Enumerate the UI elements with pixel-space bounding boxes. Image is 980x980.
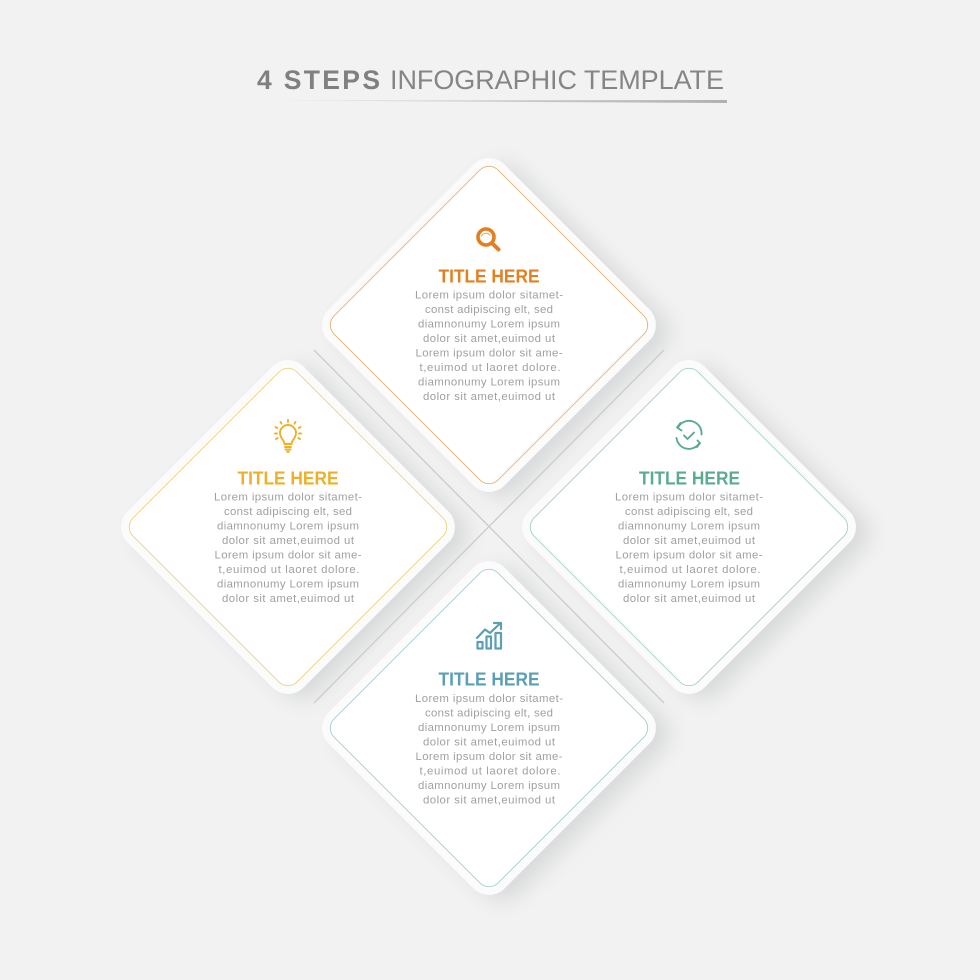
text block: Lorem ipsum dolor sitamet- — [415, 693, 563, 705]
text block: diamnonumy Lorem ipsum — [418, 319, 560, 331]
icon: magnifier — [478, 229, 498, 250]
text block: dolor sit amet,euimod ut — [423, 333, 556, 345]
panel: right step — [513, 351, 865, 703]
heading: TITLE HERE — [639, 468, 740, 488]
text block: dolor sit amet,euimod ut — [423, 391, 556, 403]
icon: refresh check — [676, 421, 702, 449]
text block: diamnonumy Lorem ipsum — [418, 376, 560, 388]
icon: light bulb — [275, 420, 301, 452]
title: 4 STEPS — [257, 65, 380, 95]
text block: t,euimod ut laoret dolore. — [420, 765, 560, 777]
text block: t,euimod ut laoret dolore. — [420, 362, 560, 374]
panel: bottom step — [313, 552, 665, 904]
text block — [415, 693, 563, 806]
heading: TITLE HERE — [238, 468, 338, 488]
text block: t,euimod ut laoret dolore. — [620, 564, 760, 576]
heading: TITLE HERE — [438, 266, 540, 286]
title underline — [257, 100, 727, 103]
text block: Lorem ipsum dolor sit ame- — [214, 550, 362, 562]
card shadows — [127, 156, 878, 909]
panel: left step — [112, 351, 464, 703]
text block: diamnonumy Lorem ipsum — [217, 578, 359, 590]
text block: Lorem ipsum dolor sitamet- — [214, 492, 362, 504]
text block: const adipiscing elt, sed — [224, 506, 352, 518]
title: INFOGRAPHIC TEMPLATE — [390, 65, 724, 95]
heading: TITLE HERE — [438, 668, 540, 690]
text block: Lorem ipsum dolor sitamet- — [415, 290, 563, 302]
text block: diamnonumy Lorem ipsum — [618, 578, 760, 590]
text block: const adipiscing elt, sed — [625, 506, 753, 518]
text block: dolor sit amet,euimod ut — [222, 535, 355, 547]
text block: Lorem ipsum dolor sit ame- — [416, 751, 563, 763]
text block: dolor sit amet,euimod ut — [623, 593, 756, 605]
text block: Lorem ipsum dolor sitamet- — [615, 492, 763, 504]
text block — [415, 290, 563, 403]
text block: const adipiscing elt, sed — [425, 304, 553, 316]
text block: diamnonumy Lorem ipsum — [418, 780, 560, 792]
text block: dolor sit amet,euimod ut — [423, 794, 556, 806]
text block: diamnonumy Lorem ipsum — [618, 521, 760, 533]
text block: dolor sit amet,euimod ut — [623, 535, 756, 547]
text block — [615, 492, 763, 605]
text block — [214, 492, 362, 605]
text block: Lorem ipsum dolor sit ame- — [616, 550, 763, 562]
text block: Lorem ipsum dolor sit ame- — [416, 348, 563, 360]
text block: diamnonumy Lorem ipsum — [418, 722, 560, 734]
cross divider lines — [314, 350, 664, 703]
icon: growth chart — [477, 623, 501, 648]
panel: top step — [313, 149, 665, 501]
text block: const adipiscing elt, sed — [425, 708, 553, 720]
text block: dolor sit amet,euimod ut — [222, 593, 355, 605]
text block: t,euimod ut laoret dolore. — [218, 564, 360, 576]
text block: dolor sit amet,euimod ut — [423, 736, 556, 748]
text block: diamnonumy Lorem ipsum — [217, 521, 359, 533]
